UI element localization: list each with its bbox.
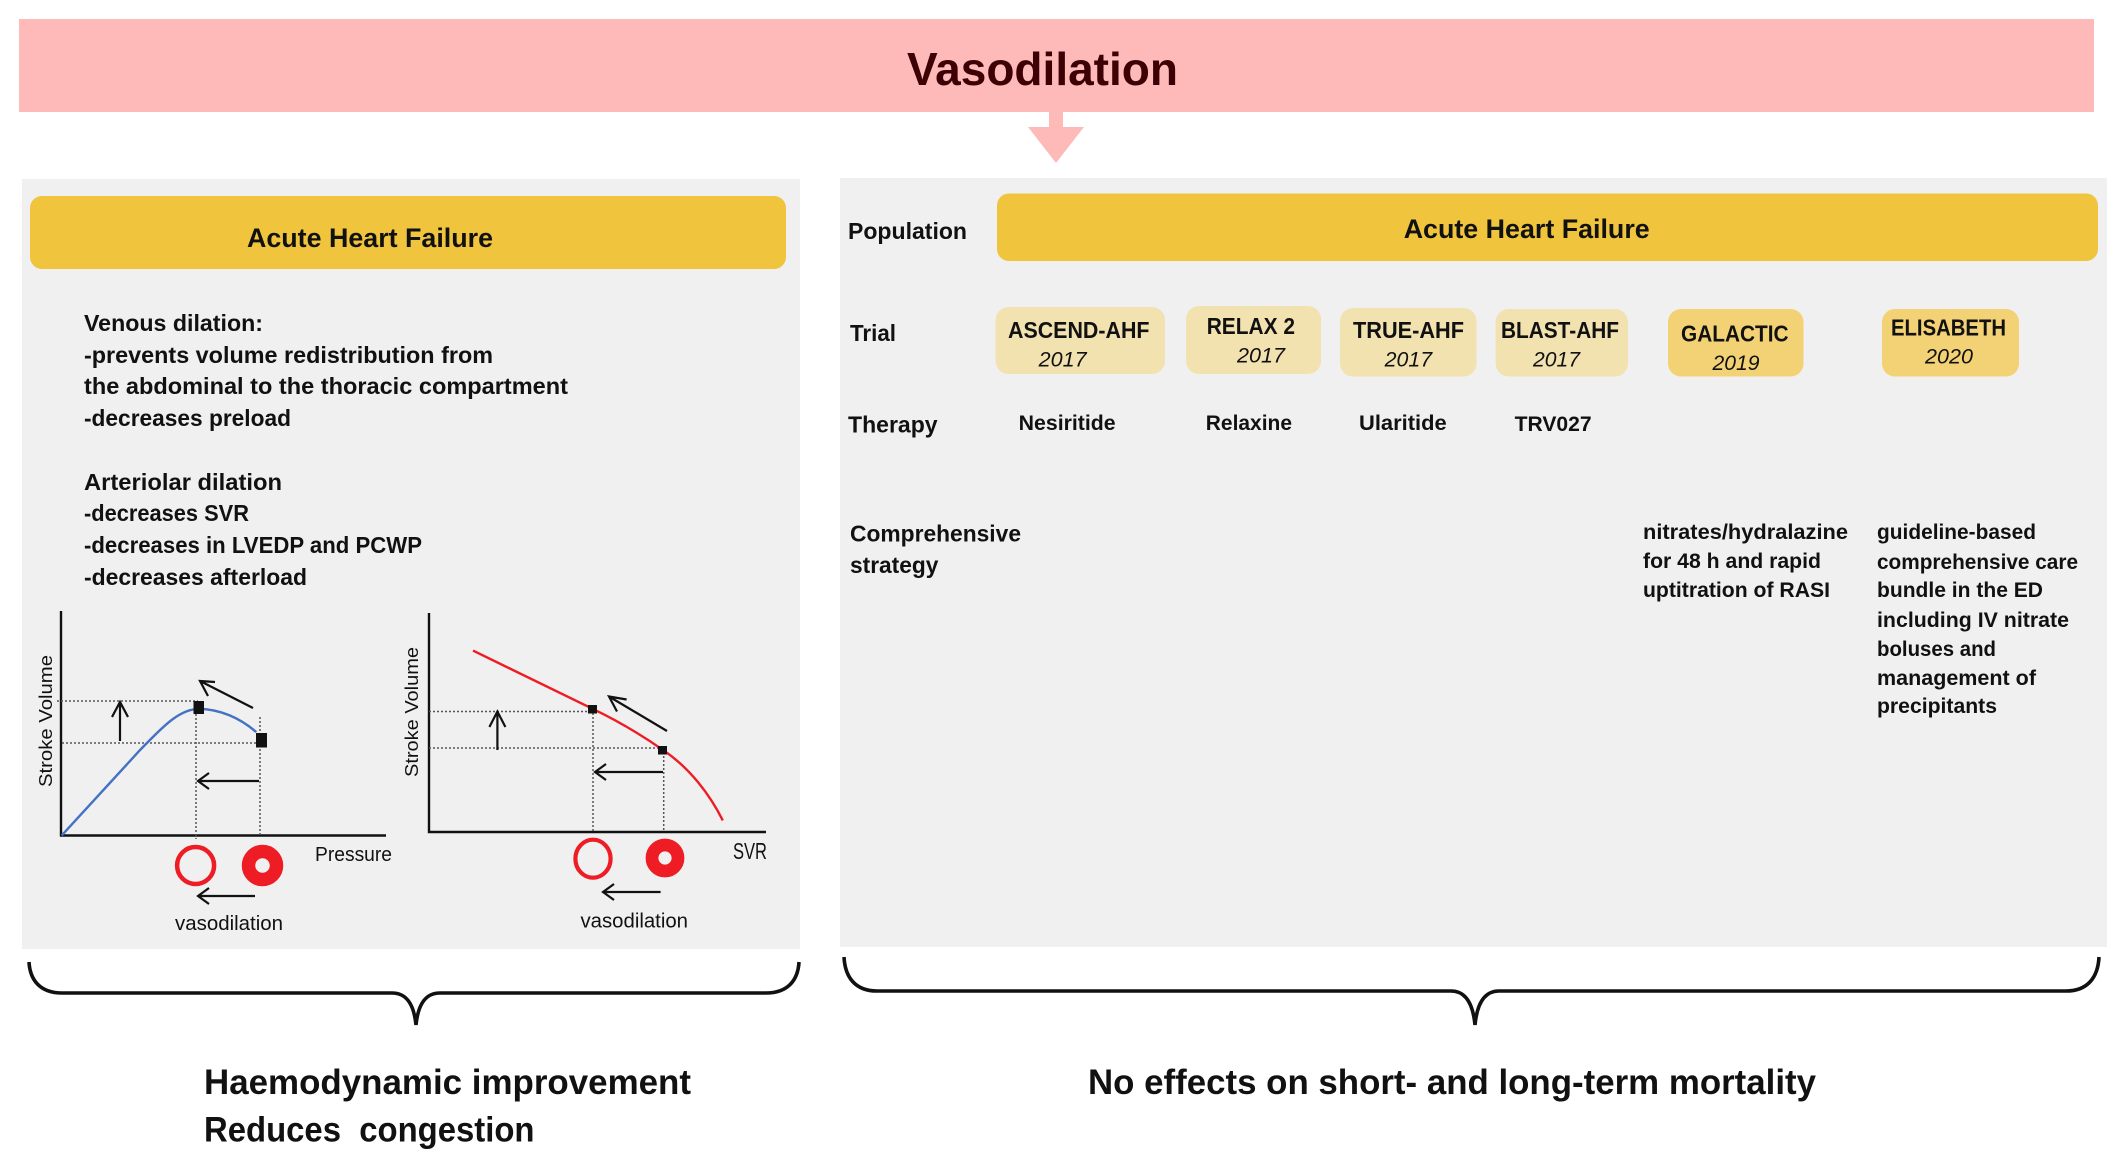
trial: RELAX 2: RELAX 2 xyxy=(1207,313,1295,339)
title banner xyxy=(19,19,2094,112)
strategy text: GALACTIC xyxy=(1643,521,1848,602)
arrow: stroke volume up xyxy=(489,712,505,750)
row label: comprehensive strategy: Comprehensive xyxy=(850,520,1021,546)
text block: arteriolar dilation: -decreases in LVEDP and PCWP xyxy=(84,532,422,558)
text block: arteriolar dilation xyxy=(84,469,422,590)
arrow: along curve xyxy=(609,696,667,731)
trial: RELAX 2 xyxy=(1186,306,1321,374)
therapy names: TRV027 xyxy=(1515,413,1592,436)
axis label: stroke volume: Stroke Volume xyxy=(36,655,56,787)
text block: venous dilation: the abdominal to the thoracic compartment xyxy=(84,373,568,399)
label: vasodilation: vasodilation xyxy=(580,910,688,932)
therapy names: Relaxine xyxy=(1206,412,1292,435)
arrow: vasodilation left xyxy=(603,884,661,900)
conclusion: left: Reduces congestion xyxy=(204,1111,534,1150)
row label: comprehensive strategy: strategy xyxy=(850,552,939,578)
text block: venous dilation: Venous dilation: xyxy=(84,310,263,336)
arrow: SVR shift left xyxy=(595,764,663,780)
icon: constricted vessel xyxy=(248,852,276,880)
axis label: SVR: SVR xyxy=(733,838,767,864)
trial: TRUE-AHF: 2017 xyxy=(1384,349,1433,372)
icon: constricted vessel xyxy=(652,845,678,871)
population heading left xyxy=(30,196,786,269)
trial: BLAST-AHF: 2017 xyxy=(1532,349,1581,372)
chart: stroke volume vs pressure xyxy=(36,611,392,935)
strategy text: GALACTIC: uptitration of RASI xyxy=(1643,579,1830,602)
text block: arteriolar dilation: -decreases afterload xyxy=(84,564,307,590)
arrow: pressure shift left xyxy=(198,773,259,789)
population heading left: Acute Heart Failure xyxy=(247,223,493,253)
text block: arteriolar dilation: -decreases SVR xyxy=(84,500,249,526)
row label: comprehensive strategy xyxy=(850,520,1021,578)
trial: ELISABETH: 2020 xyxy=(1924,346,1973,369)
trial: ASCEND-AHF xyxy=(996,307,1165,374)
trial: BLAST-AHF xyxy=(1496,309,1628,376)
strategy text: GALACTIC: for 48 h and rapid xyxy=(1643,550,1821,573)
icon: dilated vessel xyxy=(575,840,611,878)
trial: BLAST-AHF: BLAST-AHF xyxy=(1501,317,1619,343)
text block: venous dilation xyxy=(84,310,568,431)
label: vasodilation: vasodilation xyxy=(175,913,283,935)
conclusion: left: Haemodynamic improvement xyxy=(204,1063,691,1102)
trial: ASCEND-AHF: 2017 xyxy=(1038,349,1088,372)
trial: GALACTIC xyxy=(1668,309,1804,376)
strategy text: ELISABETH: including IV nitrate xyxy=(1877,609,2069,632)
strategy text: ELISABETH: bundle in the ED xyxy=(1877,579,2043,602)
title banner: Vasodilation xyxy=(907,43,1178,95)
panel: left acute heart failure physiology xyxy=(22,179,800,949)
conclusion: right: No effects on short- and long-term mortality xyxy=(1088,1063,1817,1102)
icon: dilated vessel xyxy=(177,847,214,884)
axis label: stroke volume: Stroke Volume xyxy=(402,647,422,777)
trial: ELISABETH: ELISABETH xyxy=(1891,314,2006,340)
trial: GALACTIC: 2019 xyxy=(1711,352,1760,375)
therapy names: Nesiritide xyxy=(1019,412,1116,435)
strategy text: GALACTIC: nitrates/hydralazine xyxy=(1643,521,1848,544)
strategy text: ELISABETH: guideline-based xyxy=(1877,521,2036,544)
trial: RELAX 2: 2017 xyxy=(1236,345,1286,368)
arrow: vasodilation left xyxy=(198,888,255,904)
row label: trial: Trial xyxy=(850,320,896,346)
arrow: stroke volume up xyxy=(112,702,128,741)
row label: population: Population xyxy=(848,218,967,244)
arrow: along curve xyxy=(200,681,253,708)
population heading right: Acute Heart Failure xyxy=(1404,214,1650,244)
axis label: pressure: Pressure xyxy=(315,844,392,866)
strategy text: ELISABETH: management of xyxy=(1877,667,2037,690)
therapy names xyxy=(1019,412,1592,436)
trial: ASCEND-AHF: ASCEND-AHF xyxy=(1008,317,1150,343)
panel: right clinical trials xyxy=(840,178,2107,947)
trial: ELISABETH xyxy=(1882,309,2019,376)
conclusion: left xyxy=(204,1063,691,1150)
strategy text: ELISABETH: precipitants xyxy=(1877,695,1997,718)
brace: right xyxy=(844,957,2099,1025)
row label: therapy: Therapy xyxy=(848,412,938,438)
strategy text: ELISABETH: boluses and xyxy=(1877,638,1996,661)
strategy text: ELISABETH: comprehensive care xyxy=(1877,551,2078,574)
text block: venous dilation: -decreases preload xyxy=(84,405,291,431)
trial: GALACTIC: GALACTIC xyxy=(1681,321,1789,347)
trial: TRUE-AHF xyxy=(1340,308,1476,376)
chart: stroke volume vs SVR xyxy=(402,613,767,932)
text block: venous dilation: -prevents volume redistribution from xyxy=(84,342,493,368)
arrow: banner down xyxy=(1028,112,1084,163)
population heading right xyxy=(997,194,2098,261)
brace: left xyxy=(29,962,799,1025)
strategy text: ELISABETH xyxy=(1877,521,2078,718)
text block: arteriolar dilation: Arteriolar dilation xyxy=(84,469,282,495)
therapy names: Ularitide xyxy=(1359,412,1447,435)
trial: TRUE-AHF: TRUE-AHF xyxy=(1353,317,1464,343)
